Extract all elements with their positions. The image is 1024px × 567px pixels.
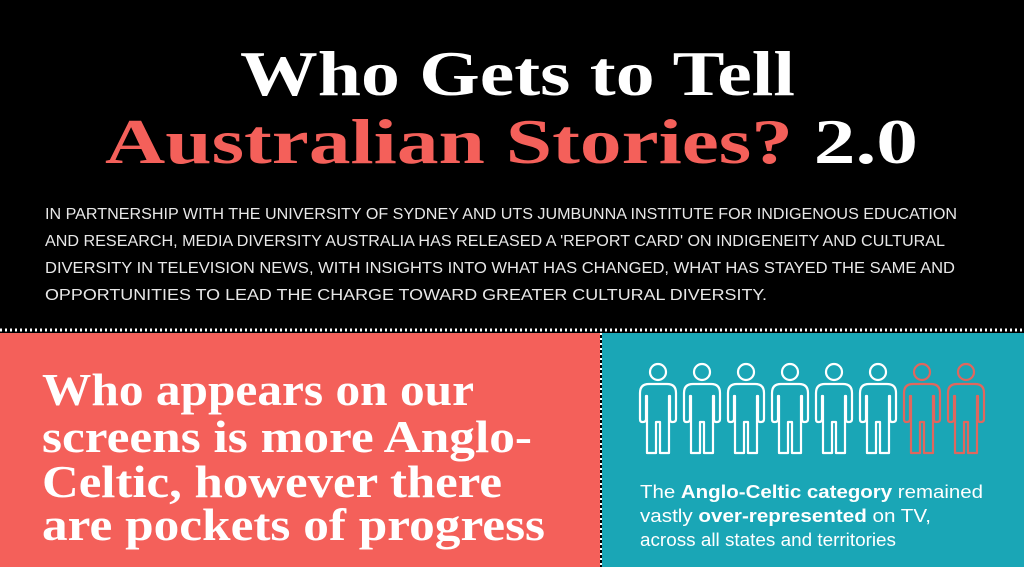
intro paragraph: DIVERSITY IN TELEVISION NEWS, WITH INSIGHTS INTO WHAT HAS CHANGED, WHAT HAS STAYED THE SAME AND xyxy=(45,260,955,277)
panel: teal statistic xyxy=(602,333,1024,567)
stat text: across all states and territories xyxy=(640,530,896,550)
panel: coral headline: Celtic, however there xyxy=(42,456,502,507)
stat text xyxy=(640,482,983,550)
title: Who Gets to Tell xyxy=(240,38,795,109)
icon: people row xyxy=(640,364,984,453)
intro paragraph: AND RESEARCH, MEDIA DIVERSITY AUSTRALIA HAS RELEASED A 'REPORT CARD' ON INDIGENEITY AND CULTURAL xyxy=(45,233,945,250)
title xyxy=(105,38,918,177)
intro paragraph xyxy=(45,206,957,304)
stat text: vastly over-represented on TV, xyxy=(640,506,931,526)
panel: coral headline: are pockets of progress xyxy=(42,499,545,550)
intro paragraph: IN PARTNERSHIP WITH THE UNIVERSITY OF SYDNEY AND UTS JUMBUNNA INSTITUTE FOR INDIGENOUS EDUCATION xyxy=(45,206,957,223)
panel: coral headline: Who appears on our xyxy=(42,364,474,415)
panel: coral headline: screens is more Anglo- xyxy=(42,411,532,462)
panel: coral headline xyxy=(0,333,600,567)
intro paragraph: OPPORTUNITIES TO LEAD THE CHARGE TOWARD GREATER CULTURAL DIVERSITY. xyxy=(45,287,767,304)
stat text: The Anglo-Celtic category remained xyxy=(640,482,983,502)
title: Australian Stories? 2.0 xyxy=(105,106,918,177)
